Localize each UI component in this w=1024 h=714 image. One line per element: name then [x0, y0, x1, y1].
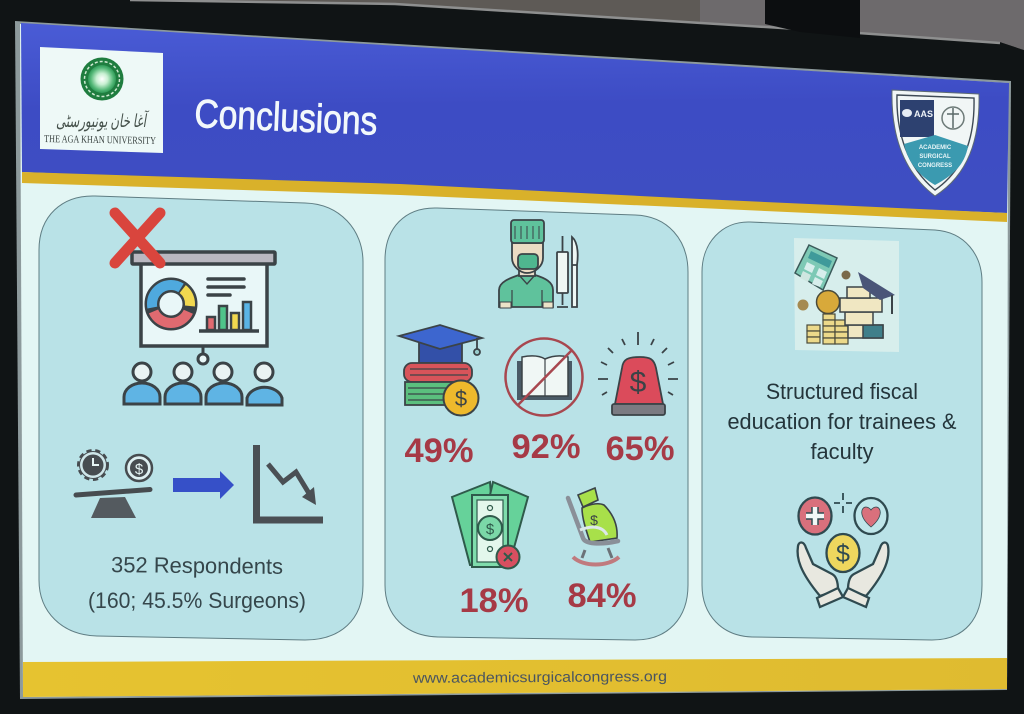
icon: banknotes with cross	[452, 482, 528, 568]
text: recommendation: education for trainees &	[728, 409, 956, 434]
text: 65%: 65%	[605, 430, 675, 468]
text: respondents	[88, 552, 306, 613]
text: 18%: 18%	[459, 582, 529, 620]
icon: graduation cap on books with coin	[399, 325, 482, 416]
icon: declining chart	[256, 445, 323, 520]
text: 92%: 92%	[511, 428, 581, 466]
text: 84%: 84%	[567, 577, 637, 615]
icon: graduation cap on books with coin: $	[455, 386, 467, 411]
logo: Academic Surgical Congress shield: SURGICAL	[919, 154, 951, 160]
icon: time versus money scale: $	[135, 461, 144, 478]
logo: Aga Khan University: THE AGA KHAN UNIVERSITY	[44, 134, 156, 147]
logo: Academic Surgical Congress shield	[892, 90, 979, 196]
icon: caring hands with health and money	[798, 493, 888, 607]
title: Conclusions	[194, 92, 378, 144]
panel: survey findings	[385, 208, 688, 640]
icon: time versus money scale	[76, 451, 152, 518]
arrow	[173, 471, 234, 499]
text: 49%: 49%	[404, 432, 474, 470]
icon: audience	[124, 363, 282, 405]
text: recommendation: Structured fiscal	[766, 379, 918, 404]
header band	[21, 23, 1009, 213]
icon: caring hands with health and money: $	[836, 540, 850, 568]
panel: recommendation	[702, 222, 982, 640]
icon: surgeon with instruments	[499, 220, 578, 308]
icon: financial alarm	[598, 332, 678, 415]
text: respondents: (160; 45.5% Surgeons)	[88, 588, 306, 613]
panel: presentations left out	[39, 196, 363, 640]
footer band	[23, 658, 1007, 697]
icon: crossed-out book	[506, 338, 582, 416]
footer url: www.academicsurgicalcongress.org	[412, 669, 667, 687]
icon: money bag on rocking chair	[568, 488, 619, 564]
logo: Aga Khan University: آغا خان یونیورسٹی	[56, 110, 149, 132]
icon: financial alarm: $	[630, 366, 647, 399]
icon: presentation board	[132, 252, 275, 364]
icon: red cross	[115, 213, 160, 263]
icon: banknotes with cross: $	[486, 521, 495, 538]
icon: money bag on rocking chair: $	[590, 512, 598, 528]
logo: Academic Surgical Congress shield: CONGRESS	[918, 163, 952, 169]
text: recommendation: faculty	[810, 439, 874, 464]
logo: Aga Khan University	[40, 47, 163, 153]
logo: Academic Surgical Congress shield: ACADEMIC	[919, 145, 952, 151]
logo: Academic Surgical Congress shield: AAS	[914, 109, 933, 119]
text: recommendation	[728, 379, 956, 464]
header gold rule	[22, 172, 1007, 222]
icon: calculator, coins and books	[794, 238, 899, 352]
text: respondents: 352 Respondents	[111, 552, 283, 579]
